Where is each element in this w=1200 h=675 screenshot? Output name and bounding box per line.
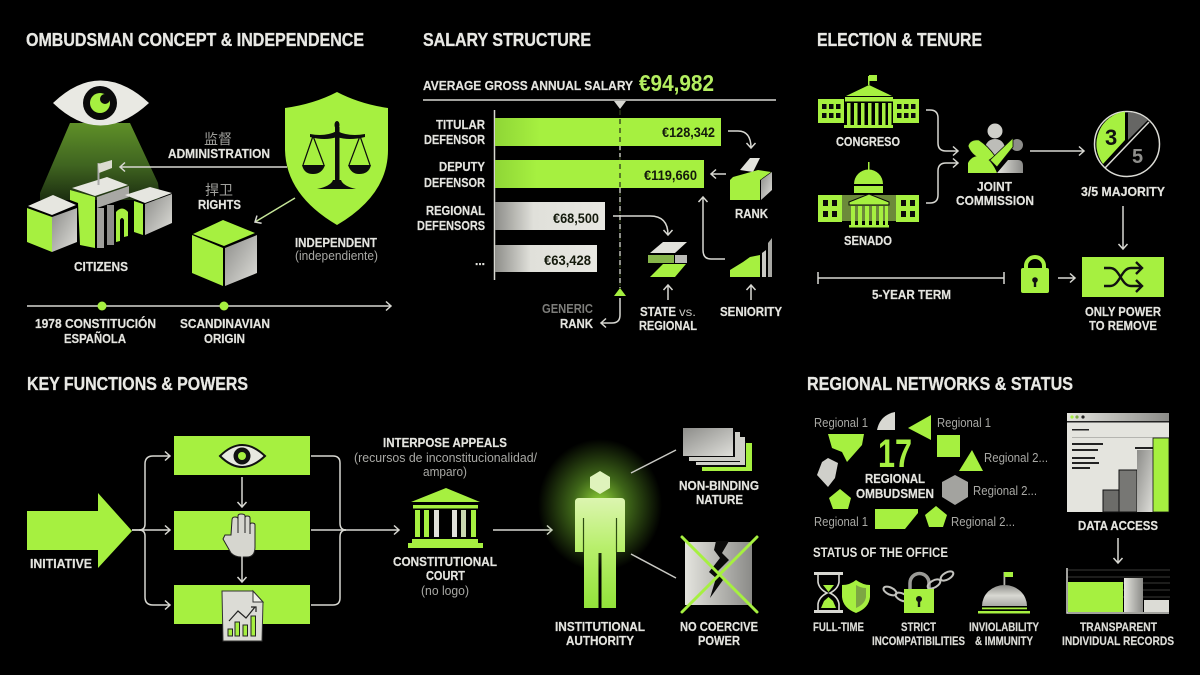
- label: average salary: AVERAGE GROSS ANNUAL SALARY: [423, 78, 633, 93]
- label: 1978 constitution: 1978 CONSTITUCIÓN: [35, 316, 156, 331]
- label: joint commission: [956, 179, 1034, 208]
- panel: election and tenure: [817, 30, 1165, 333]
- term span bracket: [818, 272, 1004, 284]
- panel: salary structure: [417, 30, 782, 333]
- panel: key functions and powers: [27, 374, 759, 648]
- heading: key functions: KEY FUNCTIONS & POWERS: [27, 374, 248, 394]
- labels: regional items: Regional 1: [814, 514, 868, 529]
- heading: regional networks: REGIONAL NETWORKS & STATUS: [807, 374, 1073, 394]
- timeline: [27, 302, 391, 310]
- icon: hourglass and shield: [814, 572, 870, 613]
- labels: regional items: Regional 2...: [973, 483, 1037, 498]
- label: state vs regional: STATE: [640, 304, 676, 319]
- text: interpose appeals: INTERPOSE APPEALS: [383, 435, 507, 450]
- figure: seventeen: 17: [878, 432, 912, 476]
- label: strict incompatibilities: [872, 620, 965, 648]
- label: scandinavian origin: [180, 316, 270, 346]
- glow behind figure: [538, 439, 662, 571]
- arrow: data to records: [1117, 538, 1119, 563]
- label: transparent individual records: INDIVIDUAL RECORDS: [1062, 634, 1174, 648]
- label: term: 5-YEAR TERM: [872, 287, 951, 302]
- icon: no coercive power: [682, 537, 757, 612]
- chart: transparent records: [1067, 568, 1170, 613]
- labels: bar categories: DEFENSORS: [417, 218, 485, 233]
- label: institutional authority: [555, 619, 645, 648]
- labels: regional items: Regional 2...: [951, 514, 1015, 529]
- label: strict incompatibilities: STRICT: [901, 620, 937, 634]
- label: full-time: FULL-TIME: [813, 620, 864, 634]
- arrow: to majority: [1030, 150, 1084, 152]
- label: rights: RIGHTS: [198, 197, 241, 212]
- labels: regional items: Regional 1: [814, 415, 868, 430]
- label: congreso: CONGRESO: [836, 134, 900, 149]
- labels: bar categories: [417, 117, 486, 268]
- label: only power to remove: [1085, 304, 1162, 333]
- arrow: to administration: [120, 166, 287, 168]
- label: regional ombudsmen: REGIONAL: [865, 471, 925, 486]
- figure: average salary value: €94,982: [639, 70, 714, 96]
- icon: senado building: [818, 162, 919, 228]
- bar chart: salaries: €119,660: [644, 167, 697, 183]
- labels: bar categories: DEFENSOR: [424, 175, 486, 190]
- label: state vs regional: vs.: [679, 305, 696, 319]
- label: no coercive power: NO COERCIVE: [680, 619, 758, 634]
- label: scandinavian origin: SCANDINAVIAN: [180, 316, 270, 331]
- arrow: shield to rights cube: [255, 198, 295, 222]
- label: constitutional court: CONSTITUTIONAL: [393, 554, 497, 569]
- icon: rights cube: [192, 220, 257, 286]
- icon: rank box: [730, 158, 772, 200]
- label: constitutional court: COURT: [426, 568, 465, 583]
- bar chart: salaries: [423, 100, 776, 288]
- heading: election and tenure: ELECTION & TENURE: [817, 30, 982, 50]
- label: joint commission: COMMISSION: [956, 193, 1034, 208]
- label: no coercive power: POWER: [698, 633, 741, 648]
- label: majority: 3/5 MAJORITY: [1081, 184, 1165, 199]
- arrows: between function bars: [241, 477, 243, 582]
- label: inviolability and immunity: INVIOLABILITY: [969, 620, 1039, 634]
- label: only power to remove: ONLY POWER: [1085, 304, 1162, 319]
- label: initiative: INITIATIVE: [30, 556, 92, 571]
- labels: bar categories: DEPUTY: [439, 159, 485, 174]
- label: institutional authority: INSTITUTIONAL: [555, 619, 645, 634]
- icon: report document: [222, 591, 263, 641]
- label: rank: RANK: [735, 206, 769, 221]
- label: administration: ADMINISTRATION: [168, 146, 270, 161]
- arrow: lock to removal: [1058, 277, 1075, 279]
- text: interpose appeals: [354, 435, 537, 479]
- text: interpose appeals: amparo): [423, 464, 467, 479]
- pie: three fifths majority: 5: [1132, 146, 1143, 168]
- icon: stop hand: [223, 514, 255, 557]
- label: regional ombudsmen: OMBUDSMEN: [856, 486, 934, 501]
- label: strict incompatibilities: INCOMPATIBILITIES: [872, 634, 965, 648]
- labels: regional items: Regional 1: [937, 415, 991, 430]
- label: constitutional court: (no logo): [421, 583, 469, 598]
- connector lines: [631, 450, 676, 578]
- icon: joint commission: [968, 124, 1023, 173]
- panel: ombudsman concept and independence: [26, 30, 391, 346]
- bar chart: salaries: €128,342: [662, 124, 715, 140]
- label: no coercive power: [680, 619, 758, 648]
- function bars: [174, 436, 310, 624]
- label: 1978 constitution: ESPAÑOLA: [64, 331, 127, 346]
- labels: bar categories: TITULAR: [436, 117, 486, 132]
- icon: shuffle removal box: [1082, 257, 1164, 297]
- label: scandinavian origin: ORIGIN: [204, 331, 245, 346]
- label: seniority: SENIORITY: [720, 304, 782, 319]
- label: non-binding nature: [679, 478, 759, 507]
- label: state vs regional: REGIONAL: [639, 318, 697, 333]
- pie: three fifths majority: 3: [1105, 125, 1117, 150]
- light beam: [40, 123, 160, 200]
- arrow: majority to removal: [1122, 206, 1124, 249]
- label: non-binding nature: NON-BINDING: [679, 478, 759, 493]
- label: institutional authority: AUTHORITY: [566, 633, 634, 648]
- labels: bar categories: REGIONAL: [426, 203, 485, 218]
- label: joint commission: JOINT: [977, 179, 1012, 194]
- label: generic rank: GENERIC: [542, 301, 594, 316]
- subheading: status of the office: STATUS OF THE OFFICE: [813, 544, 948, 560]
- label: only power to remove: TO REMOVE: [1089, 318, 1157, 333]
- icon: data access window: [1067, 413, 1169, 512]
- bar chart: salaries: €68,500: [553, 210, 599, 226]
- label: defend in Chinese: 捍卫: [205, 182, 233, 198]
- labels: regional items: Regional 2...: [984, 450, 1048, 465]
- icon: shield with scales: [285, 92, 388, 225]
- label: transparent individual records: TRANSPARENT: [1080, 620, 1158, 634]
- panel: regional networks and status: [807, 374, 1174, 648]
- icon: supervision eye: [220, 445, 265, 467]
- icon: seniority steps: [730, 238, 772, 277]
- icon: non-binding documents: [683, 428, 752, 471]
- label: constitutional court: [393, 554, 497, 598]
- icon: government building: [27, 160, 172, 252]
- label: data access: DATA ACCESS: [1078, 518, 1158, 533]
- icon: state vs regional: [648, 242, 687, 277]
- branching arrows in: [132, 456, 170, 605]
- icon: watching eye: [53, 80, 149, 126]
- label: independiente: (independiente): [295, 248, 378, 263]
- label: generic rank: [542, 301, 594, 331]
- bar chart: salaries: €63,428: [544, 252, 591, 268]
- labels: regional items: [814, 415, 1048, 529]
- label: regional ombudsmen: [856, 471, 934, 501]
- arrow: court to authority: [493, 529, 552, 531]
- label: non-binding nature: NATURE: [696, 492, 743, 507]
- label: transparent individual records: [1062, 620, 1174, 648]
- heading: ombudsman concept: OMBUDSMAN CONCEPT & INDEPENDENCE: [26, 30, 364, 50]
- arrows: chambers to joint commission: [926, 110, 958, 203]
- label: independent: INDEPENDENT: [295, 235, 377, 250]
- label: senado: SENADO: [844, 233, 892, 248]
- arrow: initiative: [27, 493, 132, 568]
- labels: bar categories: ...: [475, 253, 485, 268]
- label: inviolability and immunity: [969, 620, 1039, 648]
- pie: three fifths majority: [1094, 112, 1160, 176]
- icon: padlock: [1021, 257, 1049, 293]
- icon: immunity bell: [978, 572, 1030, 614]
- merging arrows out: [311, 456, 399, 605]
- label: inviolability and immunity: & IMMUNITY: [975, 634, 1033, 648]
- regional shapes cluster: [817, 412, 983, 529]
- labels: bar categories: DEFENSOR: [424, 132, 486, 147]
- icon: constitutional court: [408, 488, 483, 548]
- label: citizens: CITIZENS: [74, 259, 128, 274]
- marker: generic rank triangle: [614, 288, 626, 296]
- heading: salary structure: SALARY STRUCTURE: [423, 30, 591, 50]
- label: 1978 constitution: [35, 316, 156, 346]
- label: generic rank: RANK: [560, 316, 594, 331]
- icon: chained lock: [882, 569, 955, 613]
- icon: congreso building: [818, 75, 919, 128]
- label: supervision in Chinese: 监督: [204, 131, 232, 147]
- arrows: salary factors: [601, 131, 751, 323]
- label: state vs regional: [639, 304, 697, 333]
- text: interpose appeals: (recursos de inconstitucionalidad/: [354, 450, 537, 465]
- icon: institutional authority figure: [575, 471, 625, 608]
